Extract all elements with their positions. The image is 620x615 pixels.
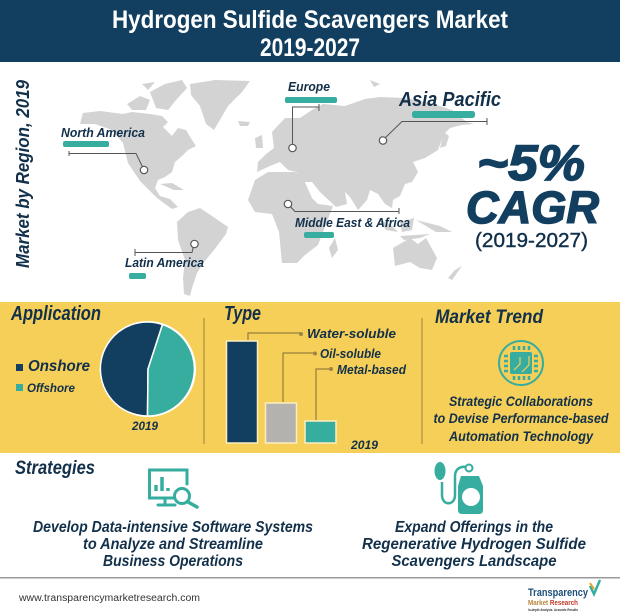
legend: onshore: Onshore <box>28 358 90 375</box>
label: North America <box>61 126 148 174</box>
rotated heading: market by region: Market by Region, 2019 <box>12 79 33 268</box>
strategy text two <box>362 519 586 570</box>
strategy text one: Business Operations <box>103 553 243 570</box>
heading: strategies: Strategies <box>15 458 95 479</box>
heading: type: Type <box>224 303 261 325</box>
label: Middle East & Africa <box>284 200 410 238</box>
bar year: 2019 <box>350 440 379 452</box>
pie year: 2019 <box>131 421 159 433</box>
CAGR callout: (2019-2027) <box>475 230 588 252</box>
heading: market trend: Market Trend <box>435 307 543 328</box>
logo: In-depth Analysis. Accurate Results <box>528 607 579 612</box>
yellow panel background <box>0 302 620 453</box>
icon: microchip <box>499 341 543 385</box>
bar chart <box>226 341 336 443</box>
label: Asia Pacific <box>379 89 501 144</box>
title banner <box>0 0 620 62</box>
strategy text one: Develop Data-intensive Software Systems <box>33 519 313 536</box>
trend text: Strategic Collaborations <box>449 394 593 409</box>
strategy text one <box>33 519 313 570</box>
logo <box>528 580 600 612</box>
trend text: Automation Technology <box>448 429 594 444</box>
trend text <box>434 394 609 444</box>
CAGR callout <box>466 135 599 252</box>
label: North America: North America <box>61 126 145 140</box>
strategy text two: Expand Offerings in the <box>395 519 553 536</box>
title banner: 2019-2027 <box>260 34 360 62</box>
strategy text two: Regenerative Hydrogen Sulfide <box>362 536 586 553</box>
label: Asia Pacific: Asia Pacific <box>398 89 501 111</box>
footer rule <box>0 577 620 578</box>
footer url: www.transparencymarketresearch.com <box>18 593 200 604</box>
label: Middle East & Africa: Middle East & Africa <box>295 215 410 230</box>
label: Latin America <box>125 240 204 279</box>
title banner: Hydrogen Sulfide Scavengers Market <box>112 6 509 34</box>
panel: type: Oil-soluble <box>320 346 381 361</box>
CAGR callout: CAGR <box>466 182 599 233</box>
legend: offshore: Offshore <box>27 381 75 395</box>
panel: type: Metal-based <box>337 362 407 377</box>
icon: gas cylinder with bulb <box>434 462 483 514</box>
label: Latin America: Latin America <box>125 255 204 270</box>
world map <box>80 80 474 296</box>
strategy text two: Scavengers Landscape <box>392 553 557 570</box>
pie chart <box>100 321 196 417</box>
bar labels: Water-soluble <box>307 326 396 341</box>
divider <box>204 318 422 444</box>
trend text: to Devise Performance-based <box>434 411 609 426</box>
label: Europe <box>285 80 337 152</box>
heading: application: Application <box>10 303 101 325</box>
CAGR callout: ~5% <box>477 135 585 191</box>
logo: Transparency <box>528 587 589 599</box>
leader lines <box>248 333 330 420</box>
panel: application <box>10 303 196 433</box>
panel: type <box>224 303 407 452</box>
logo: Market Research <box>528 598 578 607</box>
icon: monitor with magnifier <box>150 470 197 507</box>
panel: market trend <box>434 307 609 444</box>
strategy text one: to Analyze and Streamline <box>83 536 263 553</box>
label: Europe: Europe <box>288 80 330 94</box>
